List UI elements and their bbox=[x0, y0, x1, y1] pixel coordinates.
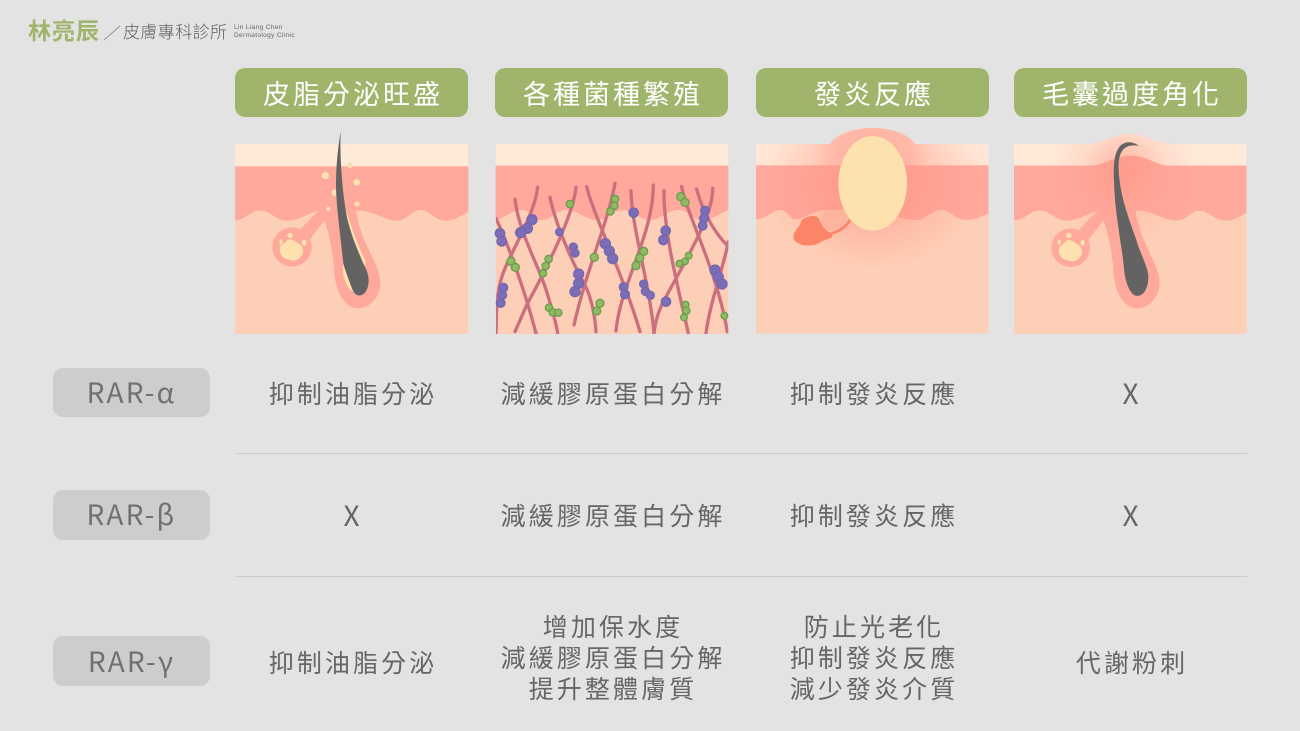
skin layers bbox=[756, 123, 989, 334]
ruptured gland bbox=[793, 210, 850, 245]
heading: hyperkeratosis: 毛囊過度角化 bbox=[1042, 73, 1222, 112]
cell: beta sebum: X bbox=[343, 495, 360, 535]
english name: Dermatology Clinic bbox=[234, 32, 295, 39]
skin layers bbox=[1014, 132, 1247, 334]
heading: sebum bbox=[235, 68, 468, 117]
blockage glow bbox=[1067, 134, 1180, 216]
logo bbox=[28, 12, 295, 46]
cell: alpha keratosis: X bbox=[1122, 373, 1139, 413]
cell: gamma inflammation: 減少發炎介質 bbox=[790, 670, 958, 706]
department name: 皮膚專科診所 bbox=[123, 18, 227, 43]
sebum droplets bbox=[322, 162, 360, 211]
row label: RAR-alpha bbox=[53, 368, 210, 417]
skin layers bbox=[496, 144, 728, 334]
english name bbox=[234, 24, 295, 39]
illustration: inflammation bbox=[756, 123, 989, 334]
skin layers bbox=[235, 144, 468, 334]
cell: alpha inflammation: 抑制發炎反應 bbox=[790, 375, 958, 411]
clinic name in green: 林亮辰 bbox=[28, 12, 100, 46]
row label: RAR-alpha: RAR-α bbox=[87, 372, 176, 412]
cell: gamma bacteria bbox=[501, 608, 725, 706]
cell: beta keratosis: X bbox=[1122, 495, 1139, 535]
illustration: sebum overproduction bbox=[235, 132, 468, 334]
cell: gamma inflammation: 防止光老化 bbox=[804, 608, 944, 644]
purple bacteria bbox=[495, 206, 727, 307]
heading: inflammation: 發炎反應 bbox=[814, 73, 934, 112]
cell: gamma inflammation bbox=[790, 608, 958, 706]
cell: gamma sebum: 抑制油脂分泌 bbox=[269, 644, 437, 680]
sebum along hair bbox=[343, 210, 366, 292]
heading: hyperkeratosis bbox=[1014, 68, 1247, 117]
illustration: follicular hyperkeratosis bbox=[1014, 132, 1247, 334]
cell: beta bacteria: 減緩膠原蛋白分解 bbox=[501, 497, 725, 533]
cell: gamma bacteria: 提升整體膚質 bbox=[529, 670, 697, 706]
cell: gamma keratosis: 代謝粉刺 bbox=[1076, 644, 1188, 680]
cell: beta inflammation: 抑制發炎反應 bbox=[790, 497, 958, 533]
cell: alpha sebum: 抑制油脂分泌 bbox=[269, 375, 437, 411]
hair bbox=[336, 132, 369, 295]
illustration: bacteria growth bbox=[495, 144, 728, 334]
inflammation glow bbox=[781, 128, 964, 254]
heading: bacteria bbox=[495, 68, 728, 117]
heading: sebum: 皮脂分泌旺盛 bbox=[263, 73, 443, 112]
collagen fibres bbox=[496, 183, 728, 333]
heading: inflammation bbox=[756, 68, 989, 117]
heading: bacteria: 各種菌種繁殖 bbox=[523, 73, 703, 112]
curled hair bbox=[1114, 142, 1148, 296]
cell: gamma inflammation: 抑制發炎反應 bbox=[790, 639, 958, 675]
follicle sheath bbox=[320, 210, 380, 308]
swollen bump tint bbox=[820, 128, 925, 165]
sebaceous gland bbox=[1051, 210, 1105, 267]
row label: RAR-gamma: RAR-γ bbox=[88, 641, 175, 681]
pustule bbox=[838, 136, 907, 231]
green bacteria bbox=[507, 193, 728, 321]
row label: RAR-gamma bbox=[53, 636, 210, 686]
cell: alpha bacteria: 減緩膠原蛋白分解 bbox=[501, 375, 725, 411]
row label: RAR-beta: RAR-β bbox=[87, 494, 176, 534]
english name: Lin Liang Chen bbox=[234, 24, 283, 31]
row label: RAR-beta bbox=[53, 490, 210, 540]
follicle sheath bbox=[1099, 210, 1160, 308]
cell: gamma bacteria: 增加保水度 bbox=[543, 608, 683, 644]
cell: gamma bacteria: 減緩膠原蛋白分解 bbox=[501, 639, 725, 675]
slash bbox=[104, 26, 120, 40]
sebaceous gland bbox=[272, 210, 326, 267]
